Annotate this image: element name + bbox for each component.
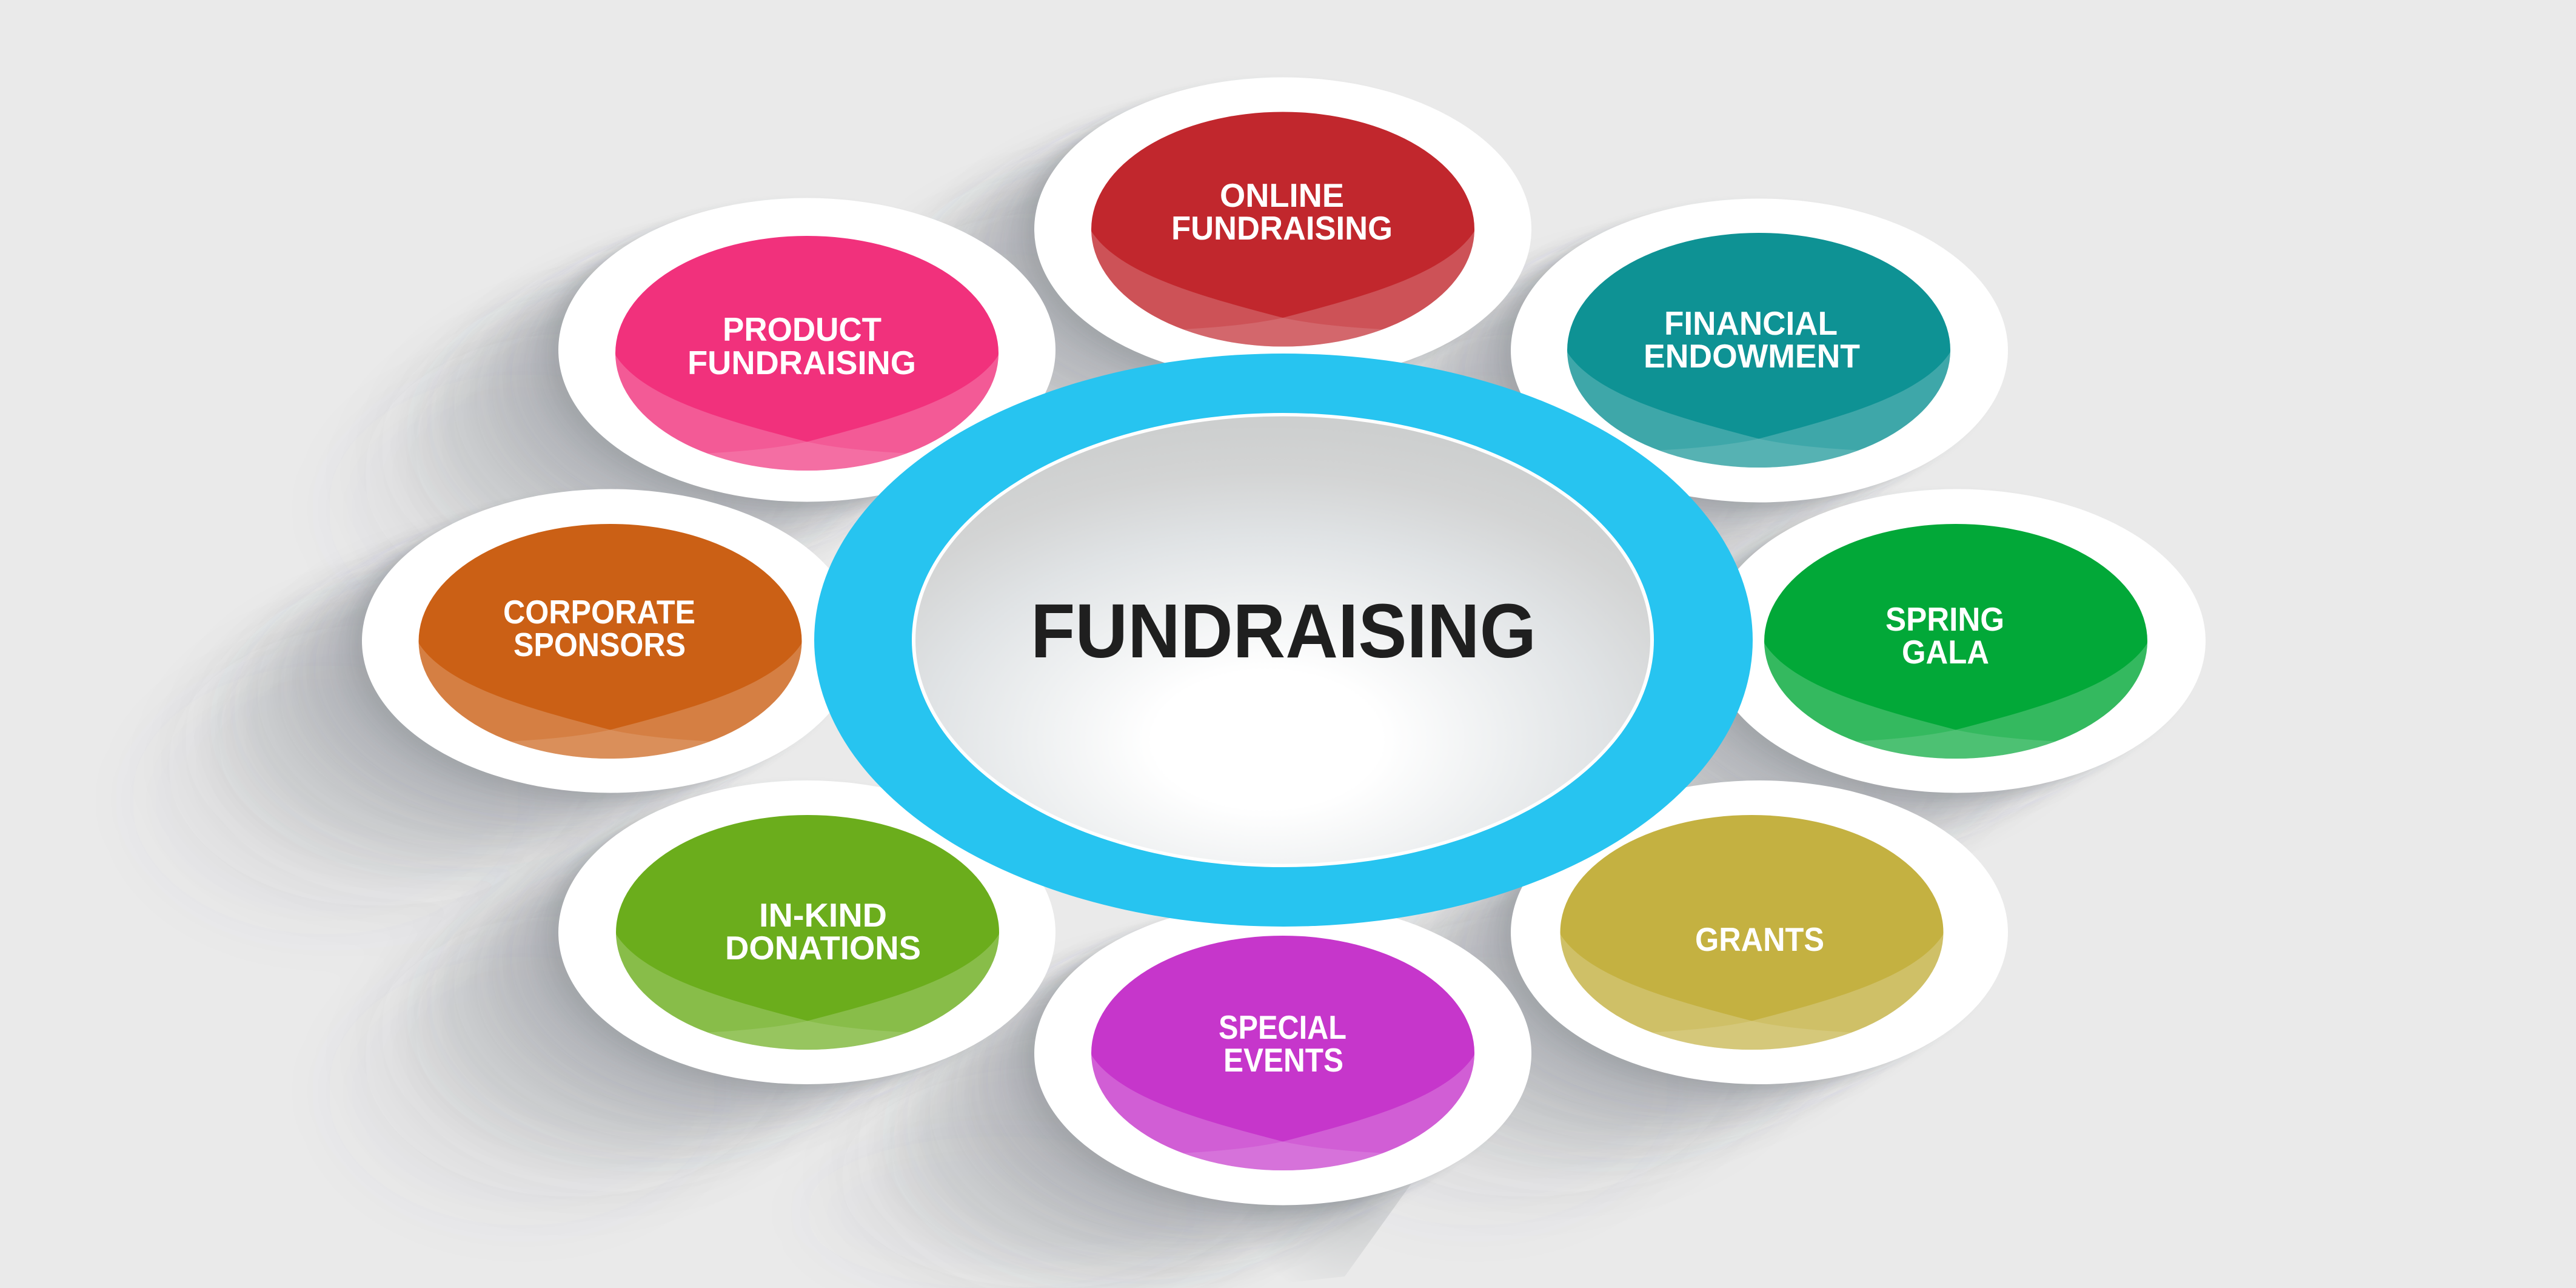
panel: financial endowment — [1511, 199, 2008, 593]
label: IN-KIND — [759, 896, 887, 934]
panel: special events — [1034, 901, 1531, 1288]
colour disc — [1510, 811, 1995, 1175]
colour disc — [564, 232, 1049, 595]
label — [1219, 1008, 1347, 1079]
panel: grants — [1510, 780, 2008, 1175]
thin white rim — [912, 413, 1654, 867]
colour disc — [367, 520, 852, 884]
label — [687, 310, 916, 381]
panel: product fundraising — [558, 198, 1055, 502]
colour disc — [1713, 520, 2198, 884]
white ring — [362, 489, 859, 793]
label — [725, 896, 921, 967]
label: EVENTS — [1223, 1041, 1343, 1079]
label: FUNDRAISING — [1171, 209, 1393, 247]
label: PRODUCT — [723, 310, 882, 348]
label — [503, 593, 695, 663]
label: GALA — [1902, 633, 1989, 671]
white ring — [558, 780, 1055, 1084]
label: DONATIONS — [725, 929, 921, 967]
long cast shadows — [132, 82, 2195, 1288]
white ring — [558, 198, 1055, 502]
colour disc — [1516, 229, 2001, 593]
label — [1644, 304, 1860, 375]
label — [1885, 600, 2004, 671]
colour disc — [1091, 112, 1474, 347]
label: FUNDRAISING — [687, 344, 916, 381]
white ring — [1511, 199, 2008, 502]
title: FUNDRAISING — [1031, 588, 1536, 674]
white ring — [1708, 489, 2206, 793]
label: ENDOWMENT — [1644, 337, 1860, 375]
panel: in-kind donations — [558, 780, 1055, 1175]
label: ONLINE — [1220, 176, 1344, 214]
panel: central hub — [814, 354, 1753, 927]
white ring — [1511, 780, 2008, 1084]
label: SPRING — [1885, 600, 2004, 638]
label: SPECIAL — [1219, 1008, 1347, 1046]
label: FINANCIAL — [1664, 304, 1838, 342]
panel: spring gala — [1708, 489, 2206, 884]
inner gradient disc — [915, 416, 1650, 864]
blue ring — [814, 354, 1753, 927]
colour disc — [565, 811, 1050, 1175]
label — [1171, 176, 1393, 247]
white ring — [1034, 901, 1531, 1206]
wedge shadow under special events — [1200, 1173, 1419, 1288]
panel: online fundraising — [1034, 78, 1531, 363]
panel: corporate sponsors — [362, 489, 859, 884]
label: CORPORATE — [503, 593, 695, 631]
colour disc — [1040, 931, 1525, 1288]
label: SPONSORS — [514, 626, 686, 663]
white ring — [1034, 78, 1531, 381]
label: GRANTS — [1695, 921, 1824, 958]
